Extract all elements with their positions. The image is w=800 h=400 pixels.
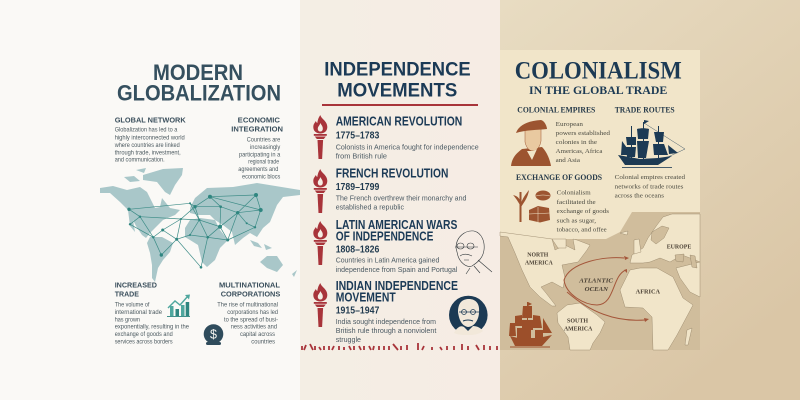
icon: torch 3	[313, 221, 327, 265]
icon: torch 4	[313, 283, 327, 327]
decorative fringe: crowd	[302, 343, 497, 350]
map labels: ATLANTIC	[578, 278, 614, 284]
block: economic integration: agreements and	[238, 166, 279, 173]
block: global network: GLOBAL NETWORK	[115, 115, 186, 124]
block: increased trade	[115, 280, 190, 345]
icon: torch 1	[313, 115, 327, 159]
block: colonial empires: COLONIAL EMPIRES	[517, 106, 596, 115]
block: exchange of goods: facilitated the	[557, 199, 596, 206]
entry: american revolution	[336, 115, 479, 161]
title: MOVEMENTS	[337, 80, 457, 102]
entry: indian independence: 1915–1947	[336, 305, 380, 316]
icon: brown ship	[509, 302, 552, 348]
map labels: OCEAN	[585, 287, 609, 293]
entry: american revolution: AMERICAN REVOLUTION	[336, 115, 462, 129]
title underline	[322, 104, 478, 106]
map land masses	[100, 168, 300, 282]
entry: french revolution: FRENCH REVOLUTION	[336, 167, 448, 181]
block: colonial empires: Americas, Africa	[556, 148, 602, 155]
block: colonial empires: European	[556, 121, 584, 128]
block: global network: where countries are linked	[114, 142, 180, 149]
block: multinational corporations: capital across	[240, 331, 275, 338]
icon: line portrait	[455, 231, 492, 274]
entry: latin american wars: 1808–1826	[336, 245, 380, 256]
entry: latin american wars: OF INDEPENDENCE	[336, 230, 433, 244]
block: increased trade: The volume of	[115, 302, 150, 309]
block: global network: through trade, investment,	[115, 149, 181, 156]
block: global network: Globalization has led to a	[115, 127, 178, 134]
map labels: SOUTH	[567, 319, 588, 325]
icon: navy ship	[618, 120, 685, 168]
entry: french revolution: established a republic	[336, 203, 404, 212]
entry: american revolution: 1775–1783	[336, 130, 380, 141]
panel background: left	[0, 0, 300, 400]
block: exchange of goods: EXCHANGE OF GOODS	[516, 173, 602, 182]
icon: growth chart	[167, 294, 190, 317]
title	[324, 59, 471, 102]
icon: torch 2	[313, 169, 327, 213]
map labels: AFRICA	[636, 289, 661, 295]
icon: round portrait	[449, 296, 488, 335]
block: increased trade: INCREASED	[115, 280, 157, 289]
block: increased trade: international trade	[115, 309, 163, 316]
panel background: middle	[300, 0, 500, 400]
entry: latin american wars: independence from Spain and Portugal	[336, 265, 458, 274]
trade route arrows	[564, 258, 645, 320]
entry: indian independence: struggle	[336, 335, 361, 344]
panel: modern globalization	[100, 60, 300, 345]
block: exchange of goods: tobacco, and offee	[557, 226, 607, 233]
title: COLONIALISM	[515, 57, 682, 84]
title: MODERN	[153, 60, 243, 85]
block: multinational corporations: MULTINATIONAL	[219, 280, 280, 289]
entry: indian independence: INDIAN INDEPENDENCE	[336, 279, 458, 293]
block: colonial empires: powers established	[556, 130, 611, 137]
block: economic integration: increasingly	[250, 144, 281, 151]
block: exchange of goods: such as sugar,	[557, 217, 596, 224]
block: trade routes	[615, 106, 686, 199]
map labels	[525, 244, 691, 333]
entry: french revolution: The French overthrew their monarchy and	[336, 194, 466, 203]
block: multinational corporations: countries	[251, 338, 275, 345]
block: increased trade: TRADE	[115, 290, 139, 299]
block: colonial empires	[517, 106, 611, 164]
block: multinational corporations: corporations has led	[227, 309, 278, 316]
block: economic integration: regional trade	[248, 159, 279, 166]
entry: latin american wars: Countries in Latin America gained	[336, 256, 439, 265]
block: multinational corporations: ness activities and	[231, 324, 278, 331]
icon: dollar coin	[204, 324, 223, 345]
entry: indian independence	[336, 279, 458, 344]
block: exchange of goods: exchange of goods	[557, 208, 609, 215]
inland seas	[651, 226, 697, 268]
arrow heads	[624, 256, 649, 322]
block: economic integration	[231, 115, 283, 180]
block: economic integration: ECONOMIC	[238, 115, 281, 124]
icon: dollar coin: $	[210, 328, 217, 342]
panel: independence movements	[302, 59, 497, 350]
block: colonial empires: and Asia	[556, 157, 580, 164]
block: economic integration: participating in a	[239, 151, 281, 158]
block: global network	[114, 115, 186, 164]
title	[515, 57, 682, 97]
icon: colonial figure	[511, 120, 551, 166]
network lines	[129, 195, 261, 267]
block: exchange of goods: Colonialism	[557, 190, 592, 197]
block: exchange of goods	[516, 173, 609, 233]
block: multinational corporations	[217, 280, 280, 345]
map labels: AMERICA	[564, 327, 593, 333]
block: trade routes: Colonial empires created	[615, 174, 686, 181]
map labels: AMERICA	[525, 261, 553, 267]
block: economic integration: INTEGRATION	[231, 125, 283, 134]
entry: indian independence: British rule through a nonviolent	[336, 326, 437, 335]
entry: american revolution: Colonists in America fought for independence	[336, 142, 479, 151]
entry: indian independence: MOVEMENT	[336, 291, 396, 305]
block: multinational corporations: CORPORATIONS	[221, 290, 280, 299]
world map with trade network	[100, 168, 300, 282]
map labels: NORTH	[527, 253, 549, 259]
icon: sugar cane and goods	[513, 190, 550, 222]
network nodes	[127, 193, 263, 269]
block: multinational corporations: to the spread of busi-	[224, 316, 278, 323]
block: trade routes: across the oceans	[615, 192, 664, 199]
panel background: right	[500, 0, 800, 400]
block: increased trade: exchange of goods and	[115, 331, 173, 338]
block: increased trade: exponentially, resulting in the	[115, 324, 190, 331]
block: increased trade: has grown	[115, 316, 140, 323]
map land masses	[500, 214, 700, 350]
block: multinational corporations: The rise of multinational	[217, 302, 278, 309]
block: economic integration: economic blocs	[242, 173, 280, 180]
title	[117, 60, 281, 106]
map ocean	[500, 212, 700, 350]
block: global network: and communication.	[115, 157, 165, 164]
parchment card	[500, 50, 700, 350]
title: GLOBALIZATION	[117, 80, 281, 106]
panel: colonialism	[500, 50, 700, 350]
block: trade routes: networks of trade routes	[615, 183, 684, 190]
map of the atlantic	[500, 212, 700, 350]
entry: latin american wars: LATIN AMERICAN WARS	[336, 218, 457, 232]
block: trade routes: TRADE ROUTES	[615, 106, 675, 115]
title: INDEPENDENCE	[324, 59, 471, 81]
title: IN THE GLOBAL TRADE	[529, 85, 668, 97]
map labels: EUROPE	[667, 244, 691, 250]
block: colonial empires: colonies in the	[556, 139, 597, 146]
entry: french revolution: 1789–1799	[336, 182, 380, 193]
block: economic integration: Countries are	[247, 137, 281, 144]
block: increased trade: services across borders	[115, 338, 173, 345]
entry: american revolution: from British rule	[336, 152, 387, 161]
entry: latin american wars	[336, 218, 458, 274]
entry: indian independence: India sought independence from	[336, 317, 436, 326]
block: global network: highly interconnected world	[115, 134, 185, 141]
entry: french revolution	[336, 167, 466, 212]
